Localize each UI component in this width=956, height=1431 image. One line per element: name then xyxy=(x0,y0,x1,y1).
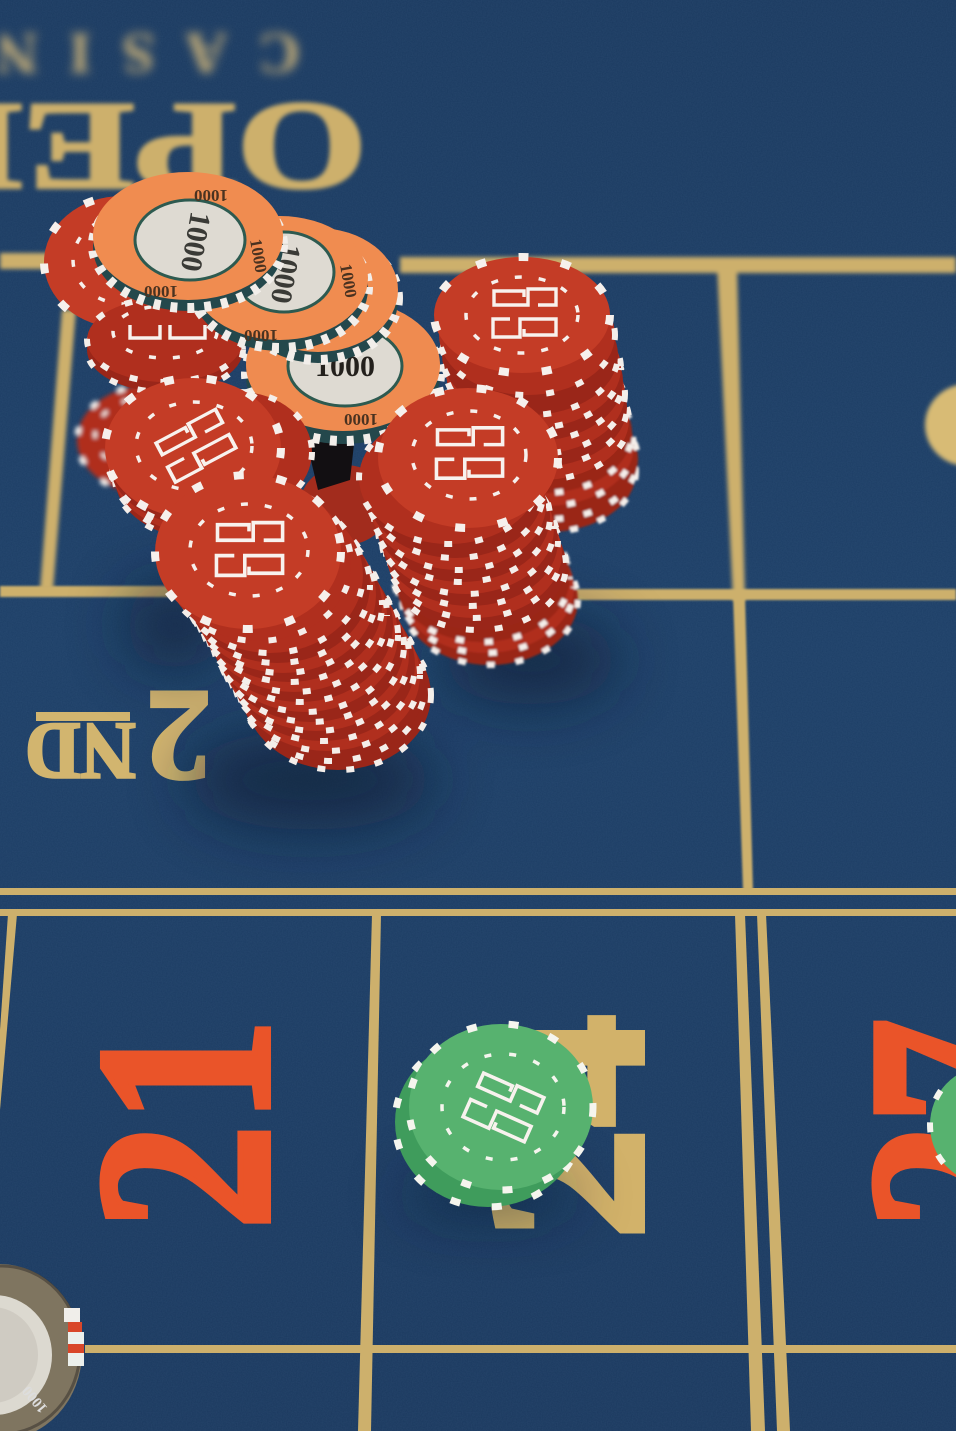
OPEN lettering, upside down: OPEN xyxy=(0,77,367,216)
orange chip middle: 1000 xyxy=(336,262,361,299)
number 21: 21 xyxy=(46,1018,323,1230)
orange chip right xyxy=(238,228,398,363)
red chip left with small stack xyxy=(105,378,312,540)
orange chip top xyxy=(93,172,283,311)
2ND lettering, upside down: 2 xyxy=(146,663,212,810)
2ND lettering, upside down xyxy=(25,663,212,810)
2ND lettering, upside down: ND xyxy=(25,706,136,797)
orange chip top: 1000 xyxy=(174,209,217,274)
orange chip middle: 1000 xyxy=(244,326,278,345)
grey chip at bottom left xyxy=(0,1264,84,1431)
number 24: 24 xyxy=(441,1014,691,1240)
chip shadows xyxy=(125,580,620,1215)
red front stack xyxy=(155,475,431,770)
top face of back right stack xyxy=(434,257,610,373)
green chip xyxy=(395,1024,593,1207)
red centre stack xyxy=(359,388,578,665)
orange chip lower: 1000 xyxy=(344,410,378,429)
red backing behind the centre gap xyxy=(300,465,390,545)
orange chip middle: 1000 xyxy=(264,241,307,306)
dark gap between chips xyxy=(305,435,355,490)
orange chip lower xyxy=(246,299,440,444)
orange chip middle xyxy=(192,216,368,351)
grey chip at bottom left: 1000 xyxy=(20,1382,51,1416)
top face of centre stack xyxy=(378,388,558,528)
orange chip top: 1000 xyxy=(144,282,178,301)
partial gold letter at right edge xyxy=(925,384,956,466)
blurred red chip at back left xyxy=(77,384,233,496)
orange chip lower: 1000 xyxy=(315,350,375,383)
orange chip top: 1000 xyxy=(194,186,228,205)
green chip at right edge xyxy=(930,1067,956,1183)
top face of front stack xyxy=(155,475,341,629)
top face of left chip xyxy=(105,378,281,518)
red chips under orange pile xyxy=(87,298,243,392)
red chip at back top left xyxy=(44,196,200,328)
red stack back right xyxy=(434,257,638,532)
orange chip top: 1000 xyxy=(246,237,271,274)
